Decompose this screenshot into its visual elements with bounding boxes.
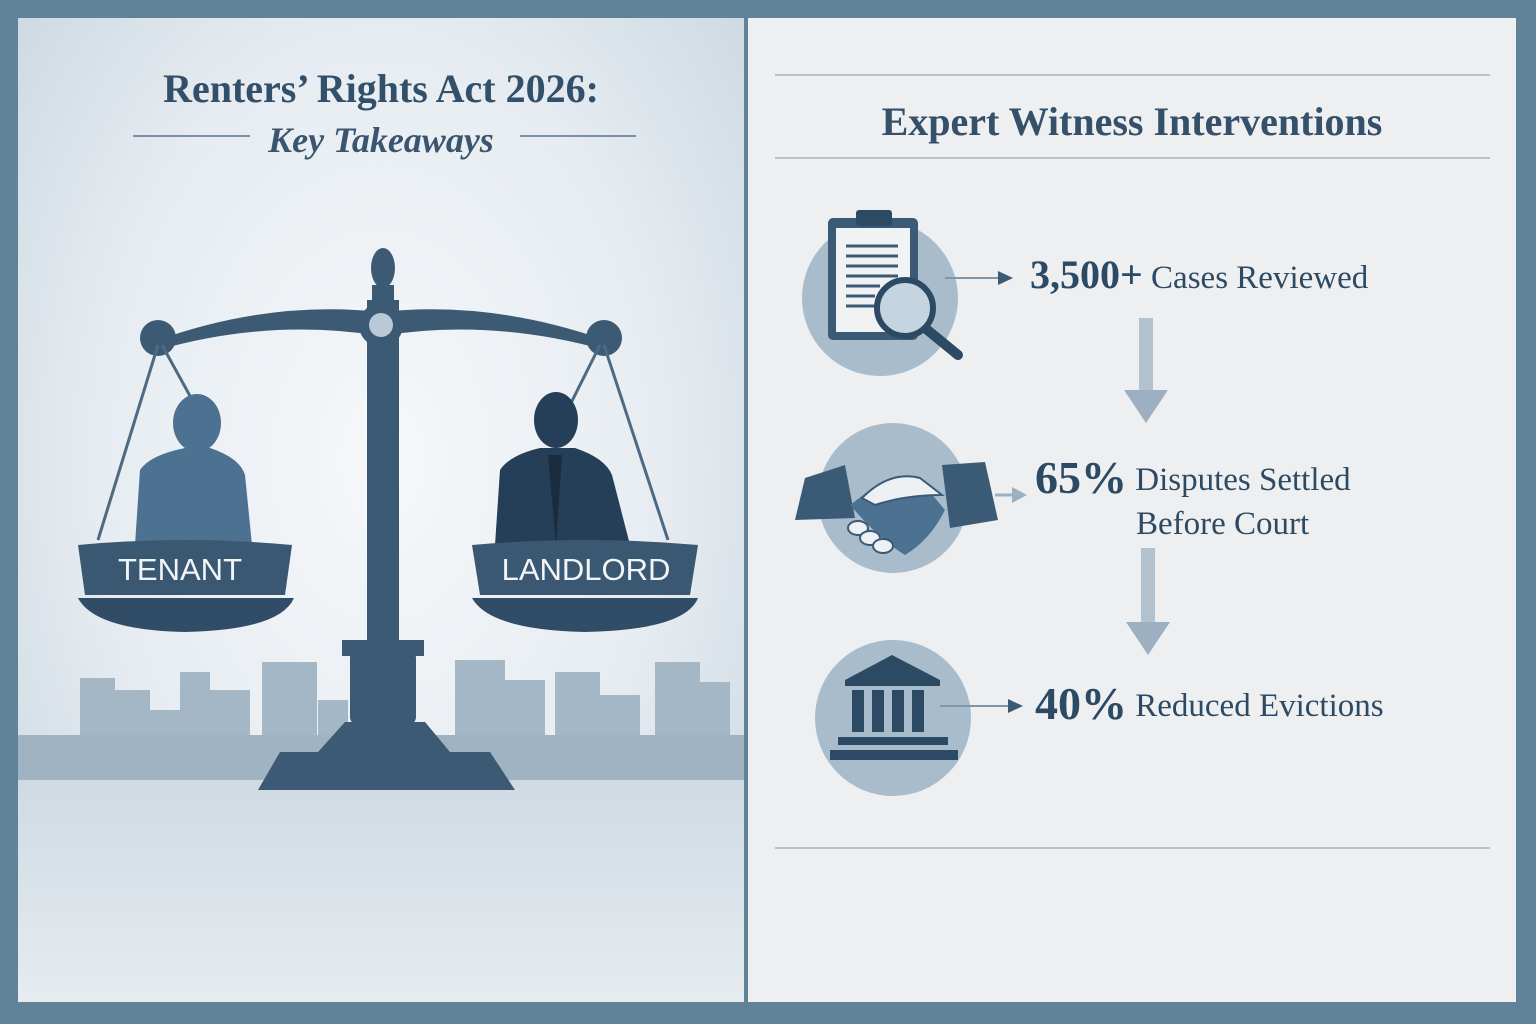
scales of justice illustration: TENANT (118, 552, 242, 587)
icon: courthouse (815, 640, 971, 796)
title rules (133, 135, 250, 137)
stat: reduced evictions: 40% Reduced Evictions (1035, 678, 1384, 729)
tenant figure (135, 394, 252, 545)
base (258, 248, 515, 790)
icon: clipboard with magnifier (802, 210, 958, 376)
stat: disputes settled: 65% Disputes Settled (1035, 452, 1351, 503)
landlord figure (495, 392, 630, 545)
skyline (80, 660, 730, 748)
pans (78, 540, 292, 595)
arrow to stat 1 (945, 271, 1013, 285)
subtitle: Key Takeaways (268, 120, 494, 160)
arrow to stat 3 (940, 699, 1023, 713)
scales of justice illustration (18, 135, 744, 1002)
panel: left scales illustration (18, 18, 744, 1002)
stat: disputes settled (1035, 452, 1351, 542)
stat: disputes settled: Before Court (1136, 506, 1309, 542)
right heading: Expert Witness Interventions (882, 99, 1382, 144)
beam (158, 309, 605, 350)
icon: handshake (795, 423, 998, 573)
stat: cases reviewed: 3,500+ Cases Reviewed (1030, 252, 1368, 297)
panel: right expert witness interventions (748, 18, 1516, 1002)
strings (98, 345, 668, 540)
arrow down 1 (1124, 318, 1168, 423)
scales of justice illustration: LANDLORD (502, 552, 670, 587)
title: Renters’ Rights Act 2026: (163, 66, 599, 111)
arrow down 2 (1126, 548, 1170, 655)
arrow to stat 2 (995, 487, 1027, 503)
